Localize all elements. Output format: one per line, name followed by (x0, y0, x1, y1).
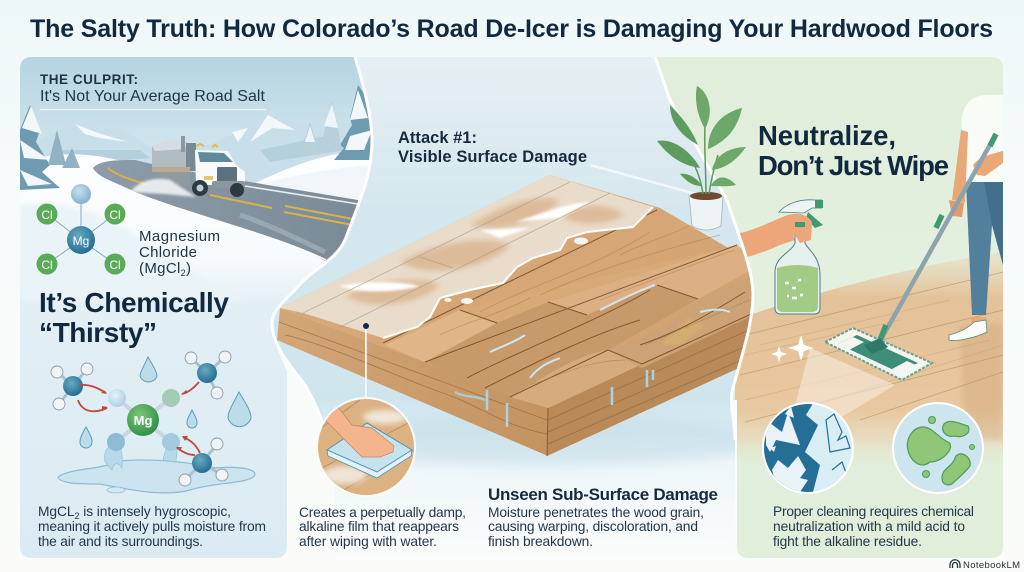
icon: MgCl2 molecule: Cl (109, 208, 121, 222)
text: sub-surface explanation (488, 505, 704, 549)
center atom (127, 404, 159, 436)
text: sub-surface explanation: Moisture penetrates the wood grain, (488, 505, 704, 520)
planks (385, 310, 497, 362)
NotebookLM credit: NotebookLM (963, 560, 1020, 571)
salt truck (152, 136, 245, 197)
icon: sparkles (771, 335, 814, 362)
rule under heading (40, 109, 266, 110)
heading: visible surface damage: Attack #1: (398, 129, 477, 147)
label: magnesium chloride: 2 (181, 268, 186, 278)
text: hygroscopic explanation: 2 (75, 511, 80, 521)
icon: MgCl2 molecule: Cl (41, 208, 53, 222)
icon: MgCl2 molecule: Mg (73, 234, 89, 248)
icon: MgCl2 molecule (36, 184, 126, 274)
wall skirting line (590, 165, 700, 195)
icon: hygroscopic molecule diagram: Mg (134, 413, 152, 428)
wood grain (440, 225, 750, 385)
title: The Salty Truth: How Colorado’s Road De-Icer is Damaging Your Hardwood Floors (30, 15, 993, 43)
text: film explanation: Creates a perpetually damp, (299, 505, 466, 520)
panel: the culprit and chemistry (20, 57, 380, 558)
puddle (58, 460, 255, 493)
wood floor with reflection (735, 252, 1003, 470)
panel: floor damage (270, 56, 754, 549)
side faces (277, 308, 548, 456)
icon: wiping hand circle (316, 397, 416, 497)
water drops (80, 357, 251, 448)
label: magnesium chloride: Chloride (139, 244, 197, 261)
panel: prevention (620, 57, 1003, 558)
text: hygroscopic explanation: meaning it actively pulls moisture from (38, 519, 266, 534)
heading: the culprit: THE CULPRIT: (40, 72, 138, 87)
heading: unseen sub-surface damage: Unseen Sub-Surface Damage (488, 485, 718, 504)
text: film explanation: after wiping with water. (299, 534, 437, 549)
bonds (122, 402, 165, 438)
heading: the culprit: It's Not Your Average Road Salt (40, 88, 266, 105)
text: cleaning explanation (773, 504, 974, 549)
text: film explanation (299, 505, 466, 549)
label: magnesium chloride: (MgCl (139, 260, 180, 277)
plank gaps (383, 210, 760, 397)
text: cleaning explanation: fight the alkaline residue. (773, 534, 922, 549)
heading: neutralize: Don’t Just Wipe (758, 150, 949, 181)
text: hygroscopic explanation: MgCL (38, 504, 75, 519)
snowy road scene (20, 85, 380, 310)
wood floor cross-section (277, 175, 800, 466)
text: cleaning explanation: Proper cleaning requires chemical (773, 504, 974, 519)
icon: spray bottle with hand (740, 200, 823, 314)
heading: chemically thirsty: “Thirsty” (39, 317, 157, 348)
label: magnesium chloride (139, 228, 220, 278)
icon: MgCl2 molecule: Cl (109, 258, 121, 272)
text: hygroscopic explanation (38, 504, 266, 549)
white panel border (272, 57, 753, 450)
heading: chemically thirsty (39, 287, 229, 348)
label: magnesium chloride: ) (186, 260, 191, 277)
heading: visible surface damage (398, 129, 587, 166)
icon: person holding mop (949, 95, 1003, 341)
text: hygroscopic explanation: is intensely hygroscopic, (79, 504, 231, 519)
icon: hygroscopic molecule diagram (51, 351, 255, 493)
text: cleaning explanation: neutralization with a mild acid to (773, 519, 965, 534)
text: sub-surface explanation: finish breakdown. (488, 534, 593, 549)
heading: visible surface damage: Visible Surface Damage (398, 148, 587, 166)
salt film (280, 175, 653, 338)
heading: the culprit (40, 72, 266, 105)
road (93, 160, 358, 262)
heading: neutralize: Neutralize, (758, 120, 896, 151)
label: magnesium chloride: Magnesium (139, 228, 220, 245)
text: sub-surface explanation: causing warping, discoloration, and (488, 519, 698, 534)
icon: alkaline crystals circle (760, 400, 856, 496)
water streaks and drips (455, 285, 730, 427)
salt spray (130, 179, 196, 197)
icon: MgCl2 molecule: Cl (41, 258, 53, 272)
top surface (280, 175, 800, 408)
text: hygroscopic explanation: the air and its surroundings. (38, 534, 203, 549)
snowy pine trees (20, 105, 60, 190)
heading: neutralize (758, 120, 949, 181)
water molecules (63, 376, 83, 396)
text: film explanation: alkaline film that reappears (299, 519, 459, 534)
icon: potted plant (657, 86, 746, 230)
heading: chemically thirsty: It’s Chemically (39, 287, 229, 318)
red arrows (78, 382, 200, 455)
icon: neutralized residue circle (890, 400, 986, 496)
callout line and dot (363, 323, 369, 400)
icon: mop (825, 134, 996, 380)
